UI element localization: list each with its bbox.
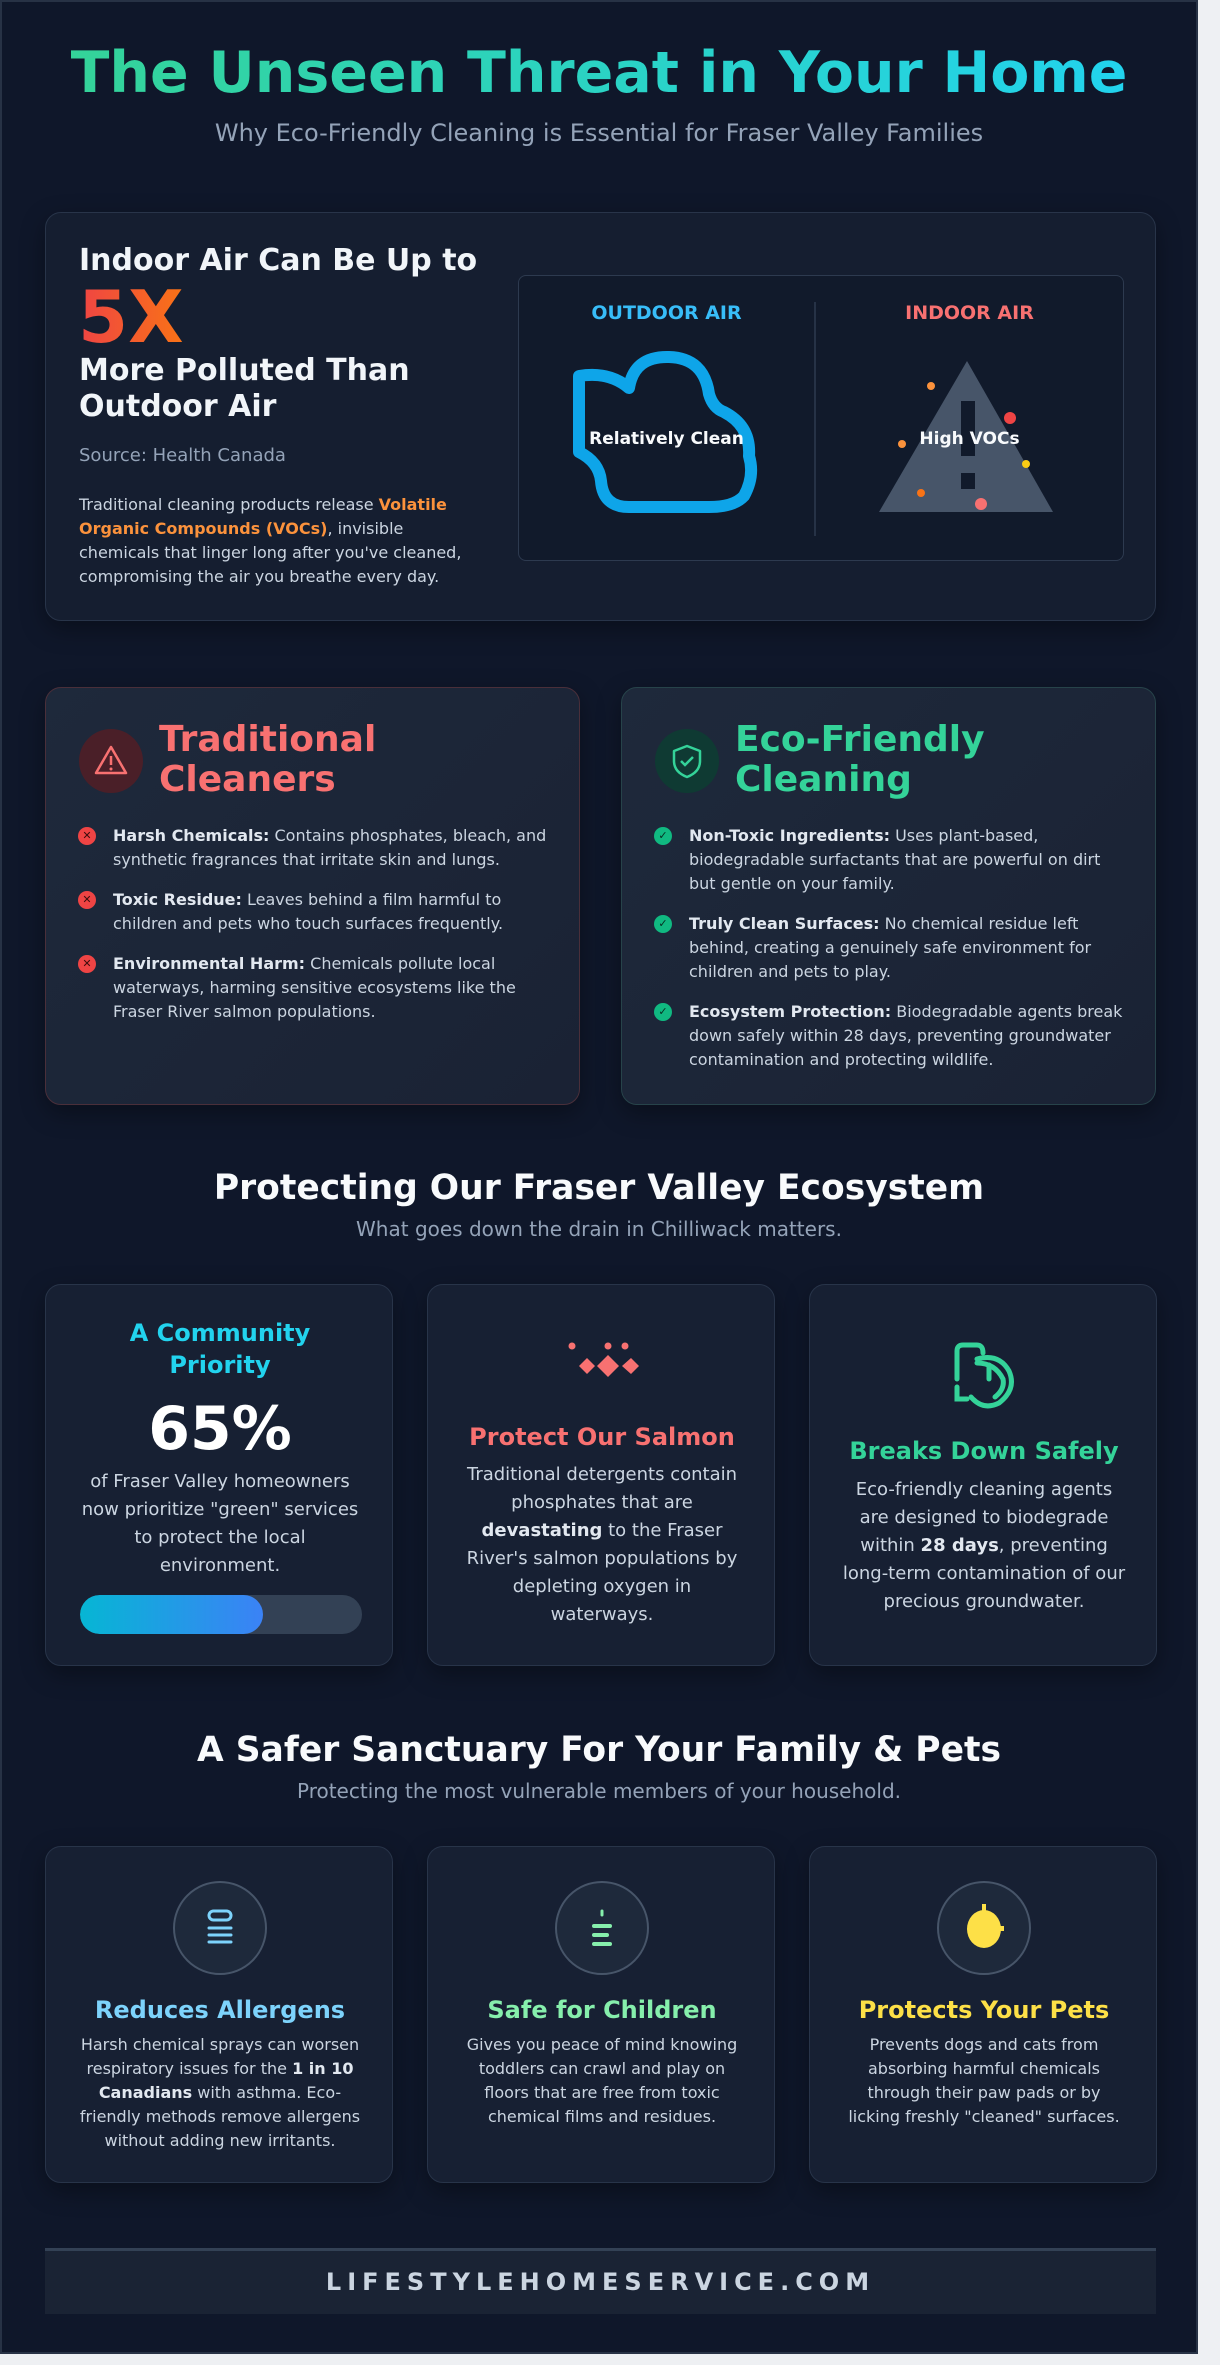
text: allergens: Canadians with asthma. Eco- [99, 2083, 341, 2102]
heading: more polluted: Outdoor Air [79, 389, 276, 424]
heading: community priority: A Community [130, 1319, 310, 1347]
label: indoor air: INDOOR AIR [905, 302, 1034, 324]
subheading: ecosystem: What goes down the drain in Chilliwack matters. [356, 1217, 842, 1241]
text: pets [848, 2035, 1120, 2126]
icon: children [555, 1881, 649, 1975]
card: reduces allergens [45, 1846, 393, 2183]
text: pets: absorbing harmful chemicals [868, 2059, 1100, 2078]
list: eco benefits: Non-Toxic Ingredients: Uses plant-based, [689, 826, 1038, 845]
paragraph: VOCs: compromising the air you breathe every day. [79, 567, 439, 586]
list: traditional drawbacks: Toxic Residue: Leaves behind a film harmful to [113, 890, 501, 909]
heading: ecosystem section: Protecting Our Fraser Valley Ecosystem [214, 1168, 984, 1208]
list: eco benefits: Truly Clean Surfaces: No chemical residue left [689, 914, 1078, 933]
source: Source: Health Canada [79, 445, 286, 466]
icon: warning triangle with VOC dots [879, 361, 1053, 512]
card: breaks down safely [809, 1284, 1157, 1666]
text: homeowners [82, 1471, 358, 1576]
text: homeowners: environment. [160, 1555, 280, 1576]
text: allergens: Harsh chemical sprays can worsen [81, 2035, 359, 2054]
list: eco benefits: ✓ [658, 917, 668, 930]
text: pets: through their paw pads or by [867, 2083, 1101, 2102]
subtitle: Why Eco-Friendly Cleaning is Essential for Fraser Valley Families [215, 119, 983, 147]
text: children: toddlers can crawl and play on [479, 2059, 725, 2078]
list: traditional drawbacks: children and pets who touch surfaces frequently. [113, 914, 503, 933]
text: breaks down: Eco-friendly cleaning agents [856, 1479, 1112, 1500]
footer: LIFESTYLEHOMESERVICE.COM [326, 2268, 875, 2296]
text: homeowners: of Fraser Valley homeowners [90, 1471, 350, 1492]
text: breaks down: are designed to biodegrade [860, 1507, 1108, 1528]
text: pets: Prevents dogs and cats from [870, 2035, 1098, 2054]
text: children [467, 2035, 737, 2126]
text: salmon: River's salmon populations by [467, 1548, 737, 1569]
text: salmon: Traditional detergents contain [467, 1464, 737, 1485]
icon: salmon [568, 1342, 639, 1377]
card: protects pets [809, 1846, 1157, 2183]
card: community priority [45, 1284, 393, 1666]
text: homeowners: to protect the local [134, 1527, 306, 1548]
heading: salmon: Protect Our Salmon [469, 1423, 735, 1451]
list: traditional drawbacks: Fraser River salmon populations. [113, 1002, 376, 1021]
card: safe for children [427, 1846, 775, 2183]
heading: traditional cleaners: Cleaners [159, 759, 336, 800]
text: allergens [80, 2035, 360, 2150]
heading: indoor air: Indoor Air Can Be Up to [79, 243, 477, 278]
stat: 5X: 5X [78, 275, 184, 359]
stat: 65%: 65% [148, 1394, 292, 1464]
text: pets: licking freshly "cleaned" surfaces. [848, 2107, 1120, 2126]
icon: cloud [573, 302, 816, 536]
text: salmon [466, 1464, 737, 1625]
list: eco benefits: Ecosystem Protection: Biodegradable agents break [689, 1002, 1122, 1021]
list: traditional drawbacks: Environmental Harm: Chemicals pollute local [113, 954, 495, 973]
heading: community priority: Priority [169, 1351, 271, 1379]
heading: eco-friendly cleaning: Cleaning [735, 759, 912, 800]
heading: pets: Protects Your Pets [859, 1996, 1109, 2024]
text: homeowners: now prioritize "green" services [82, 1499, 358, 1520]
heading: more polluted [79, 353, 410, 424]
text: salmon: depleting oxygen in [513, 1576, 691, 1597]
heading: allergens: Reduces Allergens [95, 1996, 345, 2024]
heading: community priority [130, 1319, 310, 1379]
heading: family section: A Safer Sanctuary For Your Family & Pets [197, 1730, 1001, 1770]
heading: eco-friendly cleaning [735, 719, 985, 800]
list: traditional drawbacks: synthetic fragrances that irritate skin and lungs. [113, 850, 500, 869]
label: high VOCs: High VOCs [919, 429, 1020, 449]
list: traditional drawbacks: ✕ [82, 893, 92, 906]
text: breaks down [843, 1479, 1126, 1612]
list: eco benefits: down safely within 28 days, preventing groundwater [689, 1026, 1111, 1045]
text: children: Gives you peace of mind knowing [467, 2035, 737, 2054]
icon: biodegrade [954, 1342, 1014, 1408]
list: eco benefits: behind, creating a genuinely safe environment for [689, 938, 1091, 957]
list: traditional drawbacks: waterways, harming sensitive ecosystems like the [113, 978, 516, 997]
panel: indoor air [45, 212, 1156, 621]
icon: shield [655, 729, 719, 793]
item: clean surfaces [654, 914, 1092, 981]
text: breaks down: within 28 days, preventing [860, 1535, 1108, 1556]
text: salmon: devastating to the Fraser [481, 1520, 723, 1541]
list: eco benefits: but gentle on your family. [689, 874, 895, 893]
heading: eco-friendly cleaning: Eco-Friendly [735, 719, 985, 760]
progress bar 65% [80, 1595, 362, 1634]
list: eco benefits: children and pets to play. [689, 962, 891, 981]
item: environmental harm [78, 954, 516, 1021]
heading: more polluted: More Polluted Than [79, 353, 410, 388]
icon: pets [937, 1881, 1031, 1975]
text: breaks down: precious groundwater. [884, 1591, 1084, 1612]
paragraph: VOCs: Organic Compounds (VOCs), invisible [79, 519, 403, 538]
title: The Unseen Threat in Your Home [71, 40, 1127, 106]
heading: traditional cleaners [159, 719, 376, 800]
text: allergens: respiratory issues for the 1 in 10 [87, 2059, 353, 2078]
comparison box [518, 275, 1124, 561]
paragraph: VOCs [78, 495, 461, 586]
list: eco benefits: ✓ [658, 1005, 668, 1018]
heading: breaks down: Breaks Down Safely [849, 1437, 1119, 1465]
heading: traditional cleaners: Traditional [159, 719, 376, 760]
icon: allergens [173, 1881, 267, 1975]
text: breaks down: long-term contamination of our [843, 1563, 1125, 1584]
panel: eco-friendly cleaning [621, 687, 1156, 1105]
heading: children: Safe for Children [487, 1996, 717, 2024]
panel: traditional cleaners [45, 687, 580, 1105]
list: traditional drawbacks: ✕ [82, 957, 92, 970]
footer [45, 2248, 1156, 2314]
item: toxic residue [78, 890, 503, 933]
text: allergens: friendly methods remove allergens [80, 2107, 360, 2126]
list: traditional drawbacks [78, 826, 546, 1021]
item: harsh chemicals [78, 826, 546, 869]
text: children: chemical films and residues. [488, 2107, 716, 2126]
label: relatively clean: Relatively Clean [589, 429, 744, 449]
list: eco benefits: biodegradable surfactants that are powerful on dirt [689, 850, 1100, 869]
text: salmon: phosphates that are [511, 1492, 693, 1513]
icon: warning [79, 729, 143, 793]
list: eco benefits [654, 826, 1122, 1069]
text: salmon: waterways. [551, 1604, 653, 1625]
paragraph: VOCs: Traditional cleaning products release Volatile [79, 495, 447, 514]
list: traditional drawbacks: Harsh Chemicals: Contains phosphates, bleach, and [113, 826, 546, 845]
list: eco benefits: ✓ [658, 829, 668, 842]
card: protect our salmon [427, 1284, 775, 1666]
list: traditional drawbacks: ✕ [82, 829, 92, 842]
list: eco benefits: contamination and protecting wildlife. [689, 1050, 993, 1069]
subheading: family: Protecting the most vulnerable members of your household. [297, 1779, 901, 1803]
text: allergens: without adding new irritants. [104, 2131, 336, 2150]
paragraph: VOCs: chemicals that linger long after you've cleaned, [79, 543, 461, 562]
item: non-toxic [654, 826, 1100, 893]
label: outdoor air: OUTDOOR AIR [591, 302, 742, 324]
text: children: floors that are free from toxic [484, 2083, 720, 2102]
item: ecosystem protection [654, 1002, 1122, 1069]
